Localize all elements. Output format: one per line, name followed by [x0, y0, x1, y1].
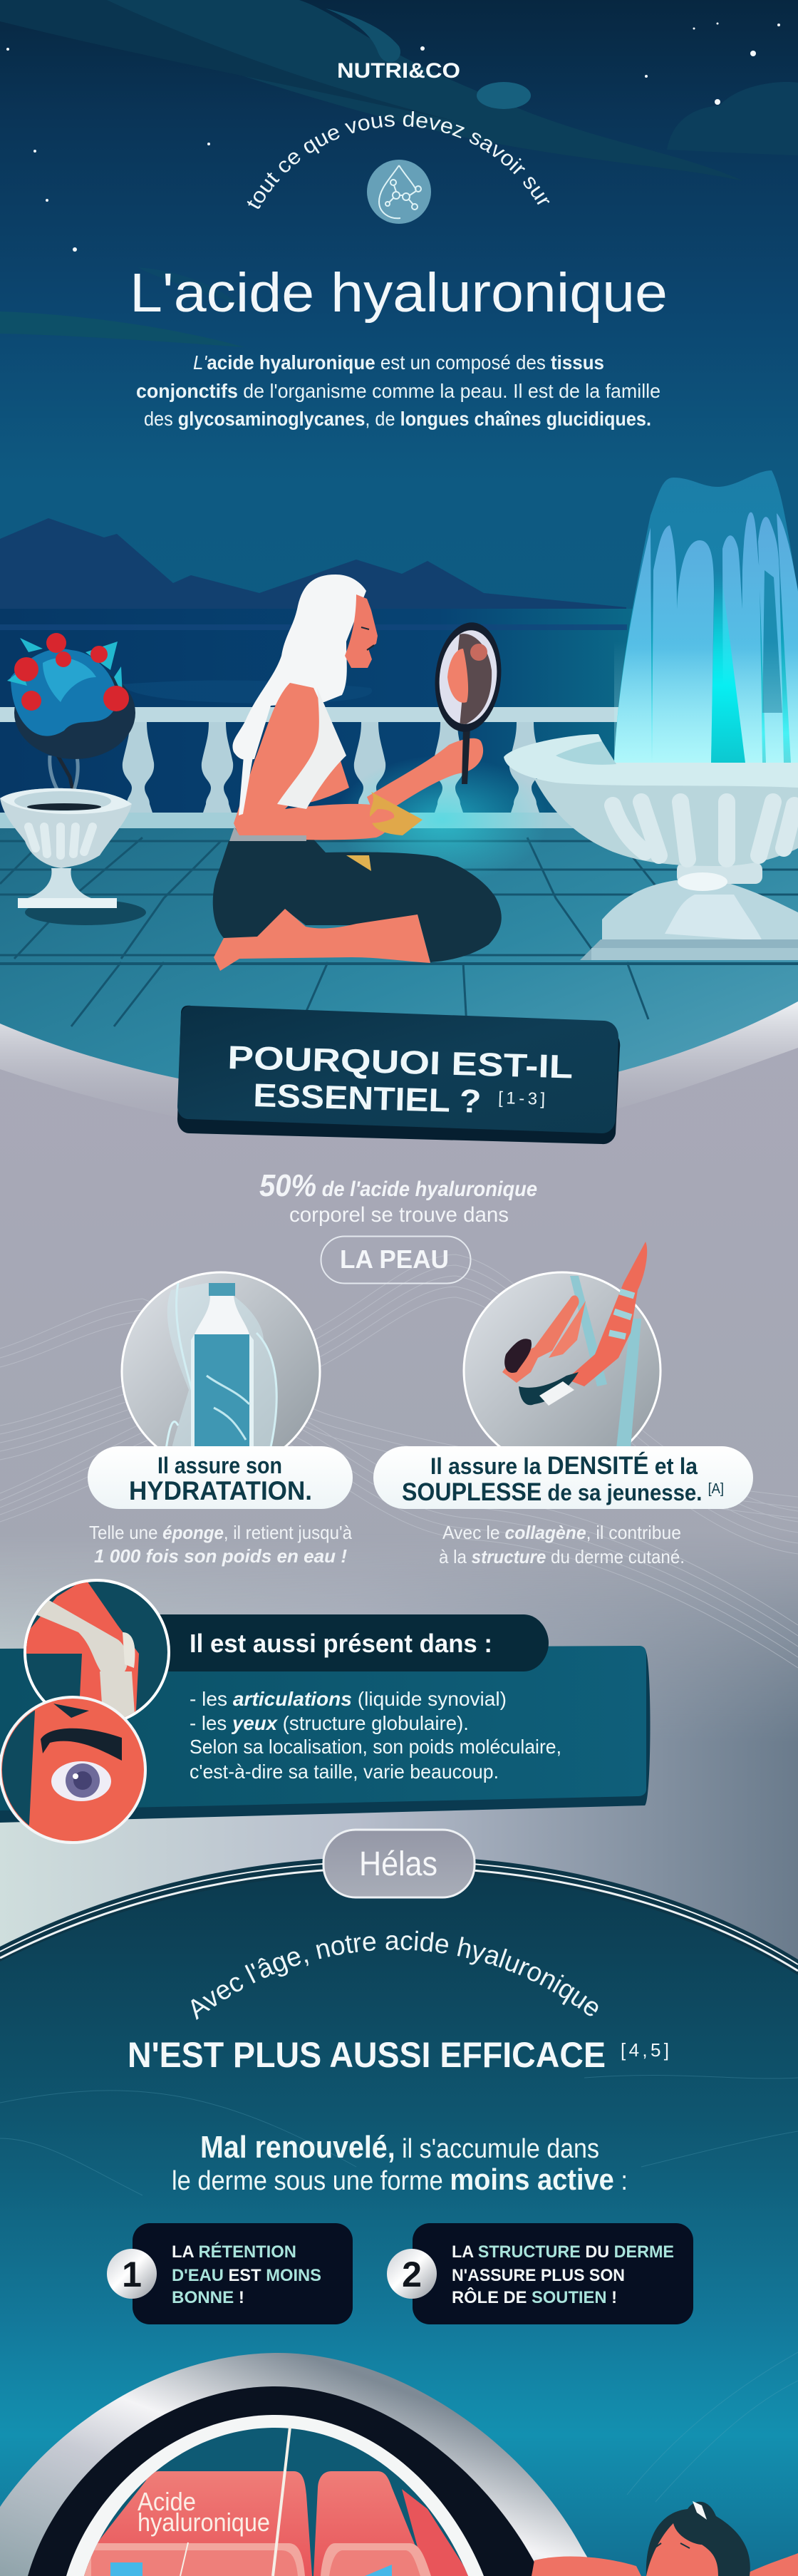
heading panel — [177, 1006, 620, 1144]
pill: la peau: LA PEAU — [340, 1245, 449, 1274]
stat: 50 percent: corporel se trouve dans — [289, 1203, 509, 1227]
curved intro text: tout ce que vous devez savoir sur — [247, 111, 550, 209]
wave line pattern — [0, 1254, 798, 1668]
grey section background — [0, 1001, 798, 2576]
callout box 1: D'EAU EST MOINS — [172, 2266, 321, 2285]
callout box 2: RÔLE DE SOUTIEN ! — [452, 2287, 617, 2307]
stars — [6, 23, 780, 252]
pill: density text: [A] — [708, 1481, 724, 1497]
dome line texture — [0, 2075, 798, 2502]
pill: helas — [323, 1830, 475, 1897]
caption: density — [439, 1522, 685, 1567]
woman tired — [532, 2501, 798, 2576]
folded legs — [214, 909, 430, 971]
background: night sky — [0, 0, 798, 1026]
body and arms — [234, 683, 391, 840]
text: poorly renewed: Mal renouvelé, il s'accumule dans — [200, 2130, 599, 2165]
text: poorly renewed — [172, 2130, 628, 2196]
caption: density: à la structure du derme cutané. — [439, 1546, 685, 1567]
heading: less efficient: [4,5] — [621, 2039, 669, 2061]
sea — [0, 609, 798, 815]
pill: helas: Hélas — [359, 1845, 437, 1883]
pill: hydration text: Il assure son — [157, 1453, 282, 1478]
pill: la peau — [321, 1236, 470, 1283]
gymnast — [502, 1242, 647, 1406]
text: poorly renewed: le derme sous une forme moins active : — [172, 2163, 628, 2196]
icon: eye — [0, 1696, 145, 1846]
face — [345, 594, 378, 668]
main title: L'acide hyaluronique — [130, 262, 668, 324]
woman with mirror — [213, 575, 507, 971]
skirt — [213, 836, 502, 962]
dark dome section — [0, 1856, 798, 2576]
mountains — [0, 518, 626, 610]
heading panel: ESSENTIEL ? — [253, 1076, 482, 1120]
panel: also present: - les articulations (liquide synovial) — [190, 1688, 507, 1710]
label: acide hyaluronique: Acide — [138, 2487, 196, 2516]
callout box 2: LA STRUCTURE DU DERME — [452, 2242, 674, 2262]
callout box 2 — [387, 2223, 693, 2324]
fountain basin — [504, 734, 798, 960]
callout box 1: 1 — [122, 2255, 142, 2294]
pill: density text: Il assure la DENSITÉ et la — [430, 1451, 698, 1480]
brand logo: NUTRI&CO — [337, 59, 460, 83]
label: acide hyaluronique — [138, 2487, 270, 2537]
waist — [229, 827, 306, 841]
panel: also present: Il est aussi présent dans : — [190, 1629, 492, 1658]
label: acide hyaluronique: hyaluronique — [138, 2508, 270, 2537]
intro paragraph: conjonctifs de l'organisme comme la peau. Il est de la famille — [136, 380, 660, 402]
callout box 2: 2 — [402, 2255, 422, 2294]
callout box 1 — [107, 2223, 353, 2324]
intro paragraph: des glycosaminoglycanes, de longues chaînes glucidiques. — [144, 408, 651, 430]
heading: less efficient: N'EST PLUS AUSSI EFFICACE — [128, 2035, 606, 2075]
pill: hydration text — [88, 1446, 353, 1509]
panel: also present: Selon sa localisation, son poids moléculaire, — [190, 1736, 561, 1758]
curved heading: Avec l'âge, notre acide hyaluronique — [191, 1930, 598, 2020]
fountain water jet — [614, 470, 798, 763]
heading panel: [1-3] — [498, 1088, 546, 1109]
stat: 50 percent: 50% de l'acide hyaluronique — [259, 1168, 537, 1203]
caption: hydration: 1 000 fois son poids en eau ! — [94, 1545, 347, 1567]
white top — [277, 688, 346, 809]
panel: also present — [0, 1614, 650, 1823]
intro paragraph: L'acide hyaluronique est un composé des tissus — [193, 351, 604, 373]
icon: knee — [21, 1579, 169, 1725]
panel: also present: - les yeux (structure globulaire). — [190, 1712, 469, 1734]
callout box 2: N'ASSURE PLUS SON — [452, 2266, 625, 2285]
stat: 50 percent — [259, 1168, 537, 1227]
raised arm — [367, 738, 483, 820]
sponge — [370, 792, 423, 835]
callout box 1: LA RÉTENTION — [172, 2242, 296, 2262]
circle: bottle hydration — [121, 1272, 321, 1446]
caption: density: Avec le collagène, il contribue — [442, 1522, 681, 1543]
heading panel: POURQUOI EST-IL — [227, 1039, 574, 1086]
hair — [232, 575, 366, 760]
icon: drop molecule — [367, 160, 431, 224]
mirror — [435, 622, 502, 784]
panel: also present: c'est-à-dire sa taille, varie beaucoup. — [190, 1761, 499, 1783]
balustrade — [0, 707, 798, 828]
potted rose tree — [0, 633, 146, 925]
clouds — [0, 0, 798, 347]
pill: density text — [373, 1446, 753, 1509]
pill: hydration text: HYDRATATION. — [129, 1476, 312, 1505]
caption: hydration: Telle une éponge, il retient jusqu'à — [89, 1522, 352, 1543]
circle: aerial gymnast — [464, 1242, 660, 1469]
pill: density text: SOUPLESSE de sa jeunesse. — [402, 1478, 717, 1506]
callout box 1: BONNE ! — [172, 2288, 244, 2307]
terrace floor — [0, 756, 798, 1142]
intro paragraph — [136, 351, 660, 430]
skin cross-section lens — [0, 2353, 598, 2576]
caption: hydration — [89, 1522, 352, 1567]
